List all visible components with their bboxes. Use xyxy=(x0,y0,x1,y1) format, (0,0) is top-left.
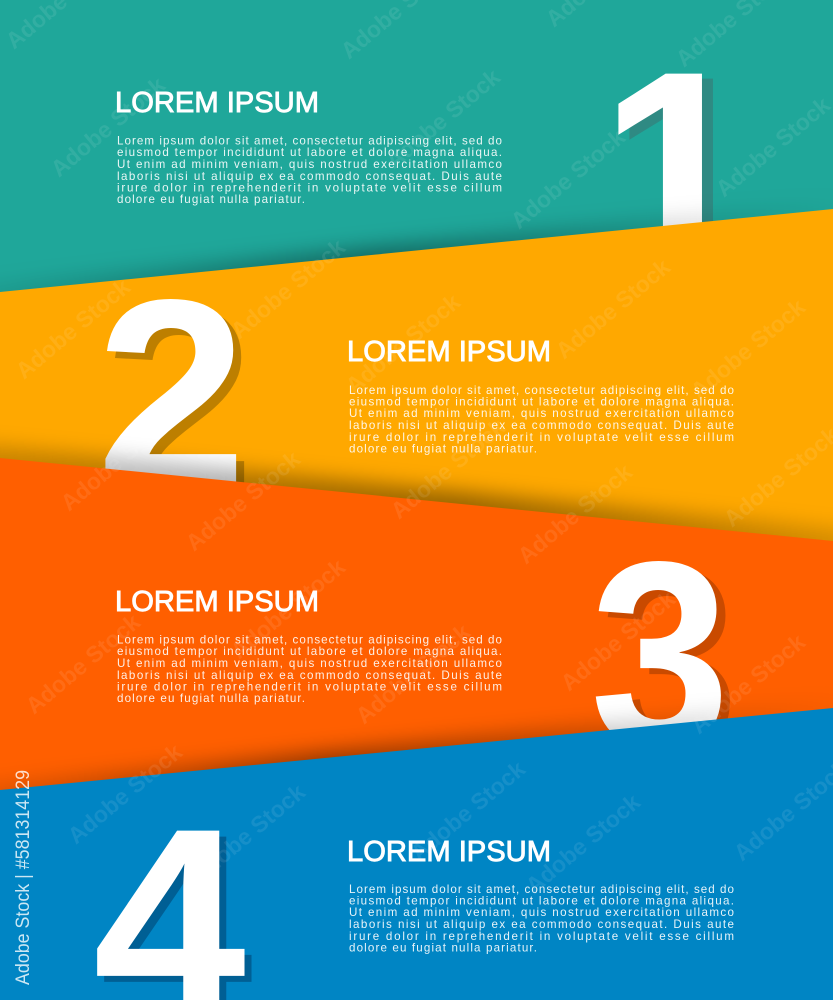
body text 2: Lorem ipsum dolor sit amet, consectetur adipiscing elit, sed do xyxy=(349,384,734,397)
panel: step 4 blue xyxy=(0,708,833,1000)
watermark overlay: Adobe Stock xyxy=(21,608,145,719)
watermark overlay: Adobe Stock xyxy=(556,585,680,696)
watermark overlay: Adobe Stock xyxy=(56,405,180,516)
body text 4 xyxy=(349,883,734,954)
panel: step 1 teal xyxy=(0,74,769,292)
heading 3: LOREM IPSUM xyxy=(115,586,319,618)
number 2: 2 xyxy=(104,252,255,548)
watermark overlay: Adobe Stock xyxy=(686,293,810,404)
body text 4: irure dolor in reprehenderit in voluptate velit esse cillum xyxy=(349,930,734,943)
body text 1: Lorem ipsum dolor sit amet, consectetur adipiscing elit, sed do xyxy=(117,134,502,148)
number 1: 1 xyxy=(601,18,751,314)
watermark overlay: Adobe Stock xyxy=(351,618,475,729)
watermark overlay: Adobe Stock xyxy=(226,553,350,664)
watermark overlay: Adobe Stock xyxy=(513,458,637,569)
body text 4: Lorem ipsum dolor sit amet, consectetur adipiscing elit, sed do xyxy=(349,883,734,896)
body text 3: laboris nisi ut aliquip ex ea commodo consequat. Duis aute xyxy=(117,669,502,682)
body text 3: dolore eu fugiat nulla pariatur. xyxy=(117,692,305,705)
body text 1: dolore eu fugiat nulla pariatur. xyxy=(117,193,305,206)
heading 1: LOREM IPSUM xyxy=(115,87,319,119)
watermark overlay: Adobe Stock xyxy=(386,413,510,524)
watermark overlay: Adobe Stock xyxy=(186,778,310,889)
watermark overlay: Adobe Stock xyxy=(406,755,530,866)
body text 1: irure dolor in reprehenderit in voluptate velit esse cillum xyxy=(117,182,502,194)
watermark overlay: Adobe Stock xyxy=(711,91,833,202)
watermark overlay: Adobe Stock xyxy=(341,288,465,399)
body text 3: eiusmod tempor incididunt ut labore et dolore magna aliqua. xyxy=(117,645,502,658)
panel: step 2 amber xyxy=(0,209,833,585)
watermark overlay: Adobe Stock xyxy=(686,628,810,739)
stock id caption: Adobe Stock | #581314129 xyxy=(13,770,34,985)
watermark overlay: Adobe Stock xyxy=(381,63,505,174)
body text 4: Ut enim ad minim veniam, quis nostrud exercitation ullamco xyxy=(349,906,734,919)
heading 2: LOREM IPSUM xyxy=(347,336,551,368)
body text 2 xyxy=(349,384,734,456)
watermark overlay: Adobe Stock xyxy=(181,445,305,556)
body text 2: Ut enim ad minim veniam, quis nostrud exercitation ullamco xyxy=(349,407,734,420)
body text 4: dolore eu fugiat nulla pariatur. xyxy=(349,942,537,954)
body text 3: Lorem ipsum dolor sit amet, consectetur adipiscing elit, sed do xyxy=(117,634,502,646)
body text 1: Ut enim ad minim veniam, quis nostrud exercitation ullamco xyxy=(117,158,502,171)
panel: step 3 red-orange xyxy=(0,458,833,835)
body text 2: eiusmod tempor incididunt ut labore et dolore magna aliqua. xyxy=(349,396,734,408)
watermark overlay: Adobe Stock xyxy=(46,71,170,182)
heading 4: LOREM IPSUM xyxy=(347,836,551,868)
number 1: 1 xyxy=(612,23,762,319)
body text 1: eiusmod tempor incididunt ut labore et dolore magna aliqua. xyxy=(117,146,502,159)
watermark overlay: Adobe Stock xyxy=(63,738,187,849)
number 3: 3 xyxy=(599,513,739,809)
number 2: 2 xyxy=(96,245,247,541)
body text 3: Ut enim ad minim veniam, quis nostrud exercitation ullamco xyxy=(117,657,502,670)
watermark overlay: Adobe Stock xyxy=(551,253,675,364)
body text 1 xyxy=(117,134,502,206)
watermark overlay: Adobe Stock xyxy=(11,273,135,384)
body text 2: dolore eu fugiat nulla pariatur. xyxy=(349,442,537,456)
body text 2: irure dolor in reprehenderit in voluptate velit esse cillum xyxy=(349,431,734,444)
watermark overlay: Adobe Stock xyxy=(226,233,350,344)
watermark overlay: Adobe Stock xyxy=(521,788,645,899)
body text 4: eiusmod tempor incididunt ut labore et dolore magna aliqua. xyxy=(349,894,734,908)
number 1 xyxy=(618,74,713,226)
body text 4: laboris nisi ut aliquip ex ea commodo consequat. Duis aute xyxy=(349,918,734,931)
body text 1: laboris nisi ut aliquip ex ea commodo consequat. Duis aute xyxy=(117,170,502,183)
number 3: 3 xyxy=(590,507,730,803)
body text 3 xyxy=(117,634,502,705)
watermark overlay: Adobe Stock xyxy=(506,123,630,234)
body text 3: irure dolor in reprehenderit in voluptate velit esse cillum xyxy=(117,680,502,694)
body text 2: laboris nisi ut aliquip ex ea commodo consequat. Duis aute xyxy=(349,419,734,432)
